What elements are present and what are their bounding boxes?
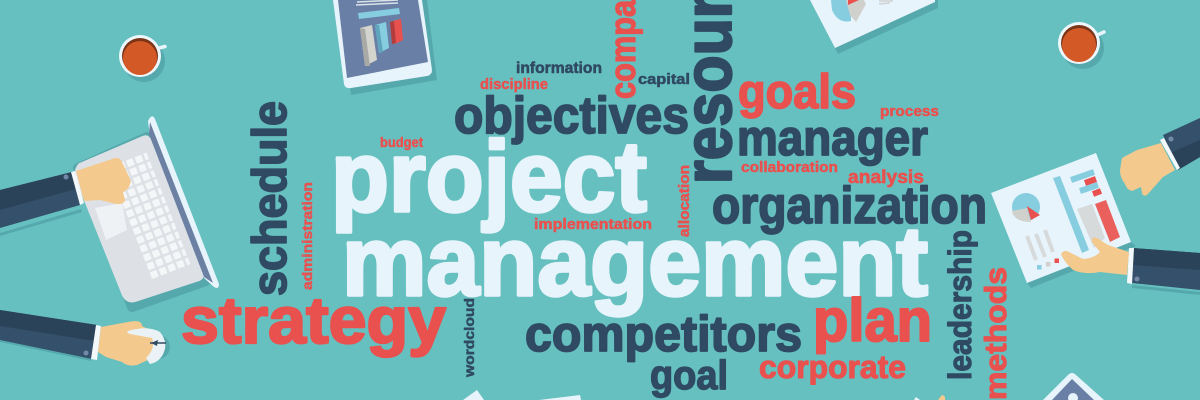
word: capital: capital <box>638 71 690 88</box>
chart: 3D bars on tablet <box>360 19 403 66</box>
word: leadership: leadership <box>942 230 978 380</box>
word: analysis: analysis <box>848 167 924 187</box>
icon: left upper arm and hand on laptop <box>0 158 131 236</box>
icon: laptop <box>77 116 219 307</box>
word: organization: organization <box>712 177 987 235</box>
word: management: management <box>342 206 928 316</box>
word: allocation: allocation <box>676 165 693 237</box>
word: corporate: corporate <box>759 349 906 385</box>
icon: coffee cup left <box>119 35 165 82</box>
chart: pie <box>1012 193 1040 222</box>
word: goal: goal <box>650 352 728 398</box>
word: plan: plan <box>813 287 932 354</box>
icon: tablet top <box>333 0 437 95</box>
icon: report sheet top <box>810 0 938 54</box>
word: schedule: schedule <box>244 101 297 296</box>
word: wordcloud: wordcloud <box>461 298 477 378</box>
icon: right upper arm and hand <box>1120 118 1200 196</box>
word: budget: budget <box>380 134 423 150</box>
word: competitors: competitors <box>525 306 802 362</box>
word cloud <box>181 0 1013 400</box>
word: implementation: implementation <box>534 216 652 233</box>
icon: left lower arm and hand on mouse <box>0 310 170 366</box>
word: process: process <box>880 103 939 120</box>
word: methods: methods <box>978 267 1013 400</box>
word: objectives: objectives <box>454 87 689 145</box>
word: discipline: discipline <box>480 76 548 93</box>
word: strategy: strategy <box>181 283 446 357</box>
icon: coffee cup right <box>1058 22 1104 69</box>
icon: right lower arm and hand holding sheet <box>1061 238 1200 295</box>
word: administration: administration <box>299 182 315 290</box>
icon: tablet bottom <box>1043 373 1104 400</box>
chart: grey columns <box>1027 230 1053 260</box>
legend squares <box>1037 258 1059 270</box>
icon: report sheet with charts right <box>991 153 1136 288</box>
word: manager: manager <box>737 110 928 166</box>
small bar rows <box>1071 172 1101 194</box>
bottom edge objects <box>463 390 945 400</box>
word: goals: goals <box>738 66 856 119</box>
word: collaboration: collaboration <box>741 159 838 176</box>
word: information: information <box>516 60 602 77</box>
word: project: project <box>331 121 647 233</box>
